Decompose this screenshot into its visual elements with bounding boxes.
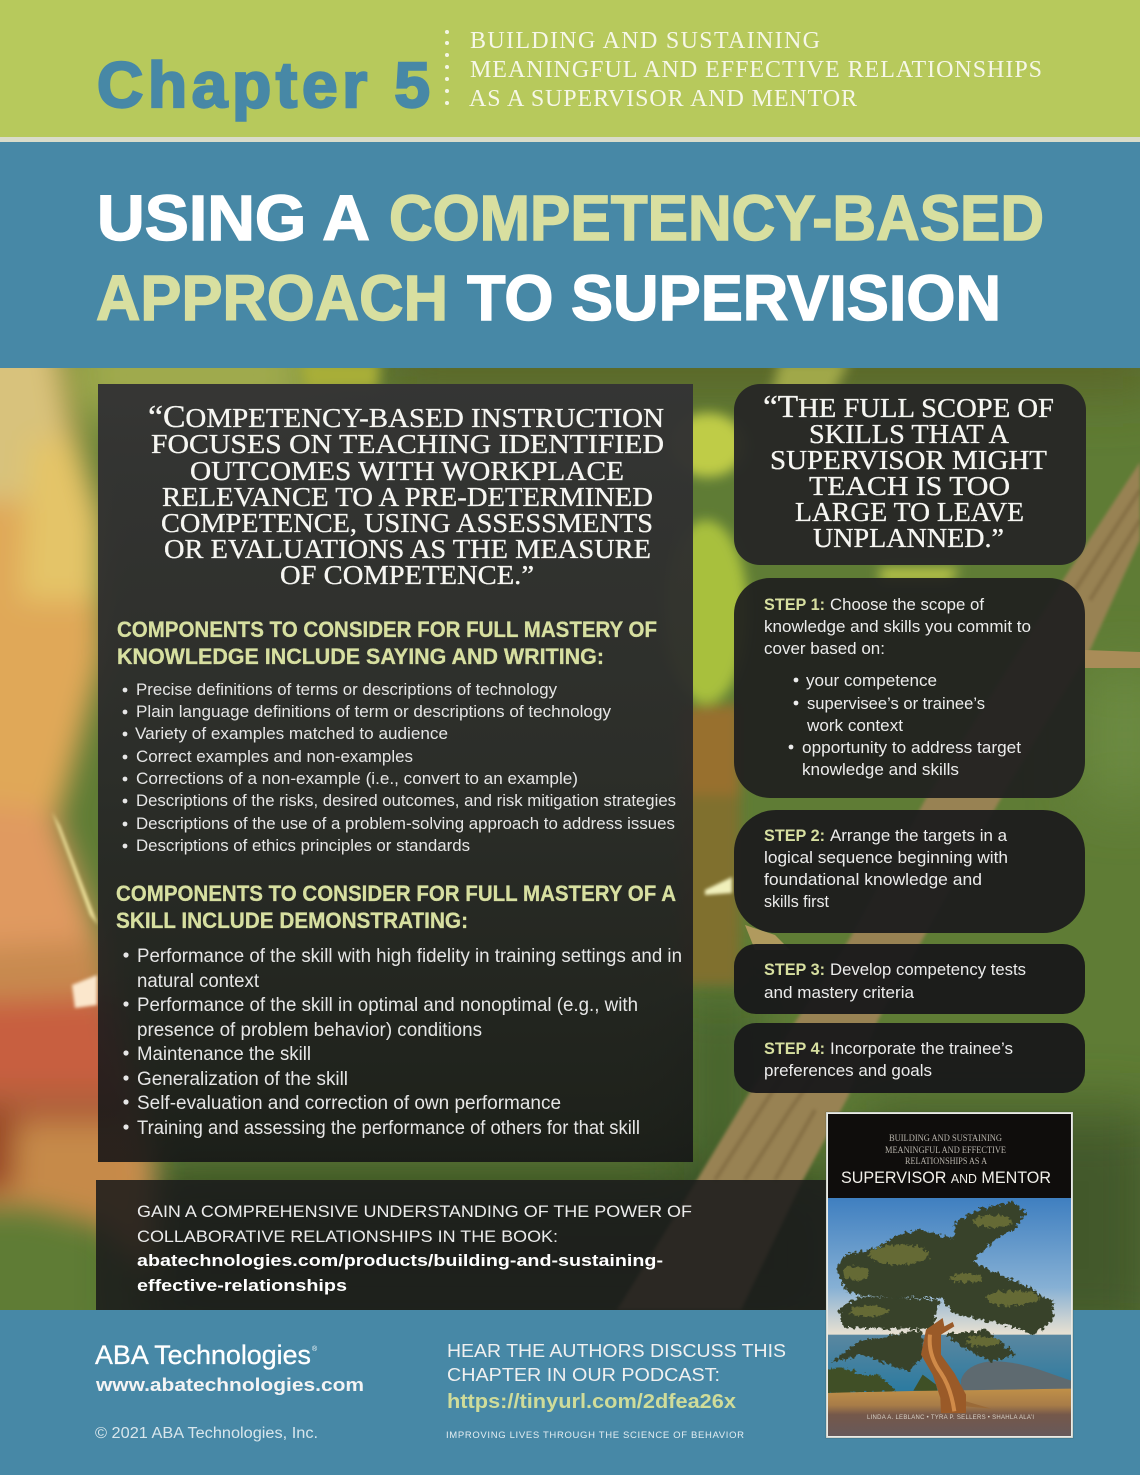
list: knowledge components [123, 680, 676, 855]
list: knowledge components: Plain language definitions of term or descriptions of technology [136, 702, 611, 721]
panel: book call to action: effective-relationships [137, 1276, 347, 1295]
quote: competency-based instruction [148, 398, 664, 590]
list: skill components: presence of problem behavior) conditions [137, 1020, 482, 1041]
panel: full scope quote: “THE FULL SCOPE OF [763, 388, 1054, 424]
panel: step 4: STEP 4: [764, 1039, 825, 1058]
cover header: BUILDING AND SUSTAINING [889, 1133, 1002, 1143]
main title: USING A [97, 182, 370, 254]
list: skill components: Maintenance the skill [137, 1044, 311, 1065]
book title in header [469, 28, 1042, 112]
panel: step 1: Choose the scope of [830, 596, 984, 614]
panel: step 1: knowledge and skills you commit to [764, 618, 1031, 636]
book title in header: AS A SUPERVISOR AND MENTOR [469, 86, 857, 112]
podcast callout: CHAPTER IN OUR PODCAST: [447, 1365, 720, 1385]
heading: knowledge components: COMPONENTS TO CONSIDER FOR FULL MASTERY OF [117, 617, 657, 642]
left finger [0, 330, 155, 1280]
quote: competency-based instruction: “COMPETENCY-BASED INSTRUCTION [148, 398, 664, 434]
quote: competency-based instruction: COMPETENCE, USING ASSESSMENTS [161, 507, 653, 538]
podcast callout: HEAR THE AUTHORS DISCUSS THIS [447, 1341, 786, 1361]
panel: step 1: cover based on: [764, 640, 885, 658]
panel: step 4 [734, 1023, 1085, 1093]
panel: book call to action: COLLABORATIVE RELATIONSHIPS IN THE BOOK: [137, 1227, 558, 1246]
list: skill components [123, 946, 682, 1139]
title band [0, 142, 1140, 368]
list: knowledge components: Corrections of a non-example (i.e., convert to an example) [136, 769, 578, 788]
panel: step 2 [734, 810, 1085, 933]
cover authors: LINDA A. LEBLANC • TYRA P. SELLERS • SHAHLA ALA’I [867, 1415, 1034, 1421]
panel: step 4: preferences and goals [764, 1062, 932, 1080]
panel: step 2: Arrange the targets in a [830, 827, 1008, 845]
heading: skill components: SKILL INCLUDE DEMONSTRATING: [116, 908, 468, 933]
logo: ABA Technologies: ® [312, 1345, 318, 1353]
footer band [0, 1310, 1140, 1475]
panel: step 1: work context [806, 717, 903, 735]
panel: full scope quote [734, 384, 1086, 565]
panel: full scope quote: SUPERVISOR MIGHT [770, 444, 1047, 475]
list: skill components: Performance of the skill with high fidelity in training settings and in [137, 946, 682, 967]
panel: competency-based instruction [98, 384, 693, 1162]
quote: competency-based instruction: OUTCOMES WITH WORKPLACE [190, 455, 624, 486]
main title [96, 182, 1044, 334]
quote: competency-based instruction: FOCUSES ON TEACHING IDENTIFIED [151, 428, 664, 459]
main title: COMPETENCY-BASED [389, 182, 1044, 254]
quote: competency-based instruction: RELEVANCE TO A PRE-DETERMINED [162, 481, 653, 512]
list: skill components: Self-evaluation and correction of own performance [137, 1093, 561, 1114]
panel: step 3: Develop competency tests [830, 961, 1026, 979]
copyright: © 2021 ABA Technologies, Inc. [95, 1425, 318, 1442]
list: skill components: Performance of the skill in optimal and nonoptimal (e.g., with [137, 995, 638, 1016]
list: knowledge components: Descriptions of ethics principles or standards [136, 836, 470, 855]
panel: step 2: skills first [764, 893, 829, 911]
chapter label: Chapter 5 [97, 49, 430, 121]
website: www.abatechnologies.com [95, 1374, 364, 1395]
list: knowledge components: Descriptions of the use of a problem-solving approach to address issues [136, 814, 675, 833]
book title in header: BUILDING AND SUSTAINING [470, 28, 820, 54]
panel: step 3: and mastery criteria [764, 984, 915, 1002]
list: knowledge components: Variety of examples matched to audience [135, 724, 448, 743]
panel: step 1: STEP 1: [764, 595, 825, 614]
book cover [826, 1112, 1074, 1438]
panel: step 1: knowledge and skills [802, 761, 959, 779]
panel: step 1: your competence [806, 672, 937, 690]
panel: book call to action [96, 1180, 830, 1310]
main title: TO SUPERVISION [467, 262, 1001, 334]
cover header: MEANINGFUL AND EFFECTIVE [885, 1145, 1006, 1155]
panel: full scope quote: TEACH IS TOO [809, 470, 1010, 501]
cover photo: pine tree on coast [826, 1198, 1074, 1436]
heading: skill components [116, 881, 676, 933]
panel: step 4: Incorporate the trainee’s [830, 1040, 1013, 1058]
list: skill components: Training and assessing the performance of others for that skill [137, 1118, 640, 1139]
heading: knowledge components: KNOWLEDGE INCLUDE SAYING AND WRITING: [117, 644, 604, 669]
panel: book call to action: abatechnologies.com/products/building-and-sustaining- [137, 1251, 663, 1270]
list: skill components: natural context [137, 971, 260, 992]
panel: step 1: opportunity to address target [802, 739, 1021, 757]
quote: competency-based instruction: OF COMPETENCE.” [280, 559, 534, 590]
header band [0, 0, 1140, 142]
heading: skill components: COMPONENTS TO CONSIDER FOR FULL MASTERY OF A [116, 881, 676, 906]
list: skill components: Generalization of the skill [137, 1069, 348, 1090]
podcast callout: https://tinyurl.com/2dfea26x [447, 1391, 736, 1413]
panel: full scope quote: UNPLANNED.” [813, 522, 1004, 553]
list: knowledge components: Correct examples and non-examples [136, 747, 413, 766]
dotted divider [445, 30, 449, 105]
panel: full scope quote: SKILLS THAT A [809, 418, 1009, 449]
list: knowledge components: Precise definitions of terms or descriptions of technology [136, 680, 557, 699]
tagline: IMPROVING LIVES THROUGH THE SCIENCE OF BEHAVIOR [446, 1430, 744, 1441]
panel: step 2: foundational knowledge and [764, 871, 982, 889]
panel: book call to action: GAIN A COMPREHENSIVE UNDERSTANDING OF THE POWER OF [137, 1202, 692, 1221]
podcast callout [447, 1341, 786, 1413]
panel: step 1 [734, 578, 1085, 798]
heading: knowledge components [117, 617, 657, 669]
logo: ABA Technologies: ABA Technologies [95, 1340, 311, 1370]
panel: step 2: logical sequence beginning with [764, 849, 1008, 867]
list: knowledge components: Descriptions of the risks, desired outcomes, and risk mitigation strategies [136, 791, 676, 810]
main title: APPROACH [96, 262, 448, 334]
panel: step 1: supervisee’s or trainee’s [807, 695, 985, 713]
panel: step 2: STEP 2: [764, 826, 825, 845]
background photo: branch and blurred leaves [0, 330, 1140, 1340]
cover header: RELATIONSHIPS AS A [905, 1156, 987, 1166]
quote: competency-based instruction: OR EVALUATIONS AS THE MEASURE [164, 533, 651, 564]
diagonal branch [617, 462, 1140, 1310]
panel: step 3: STEP 3: [764, 960, 825, 979]
panel: step 3 [734, 944, 1085, 1014]
panel: full scope quote: LARGE TO LEAVE [795, 496, 1024, 527]
book title in header: MEANINGFUL AND EFFECTIVE RELATIONSHIPS [470, 57, 1042, 83]
cover header: SUPERVISOR AND MENTOR [841, 1168, 1051, 1187]
cover header [828, 1114, 1071, 1198]
